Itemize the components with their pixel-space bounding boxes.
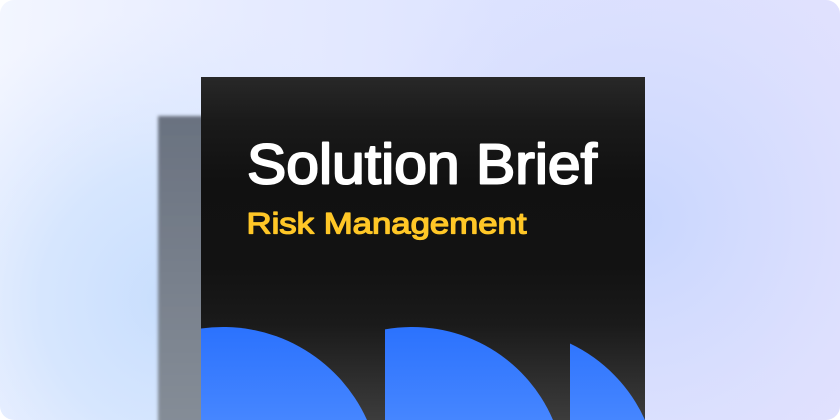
title: Solution Brief bbox=[247, 132, 597, 196]
blue quarter shapes bbox=[201, 327, 645, 420]
shape: middle arc bbox=[385, 327, 553, 420]
cover drop shadow bbox=[158, 116, 238, 420]
shape: right arc bbox=[570, 344, 645, 420]
shape: left arc bbox=[201, 327, 367, 420]
cover panel bbox=[201, 77, 645, 420]
subtitle: Risk Management bbox=[246, 208, 527, 240]
document cover bbox=[201, 77, 645, 420]
